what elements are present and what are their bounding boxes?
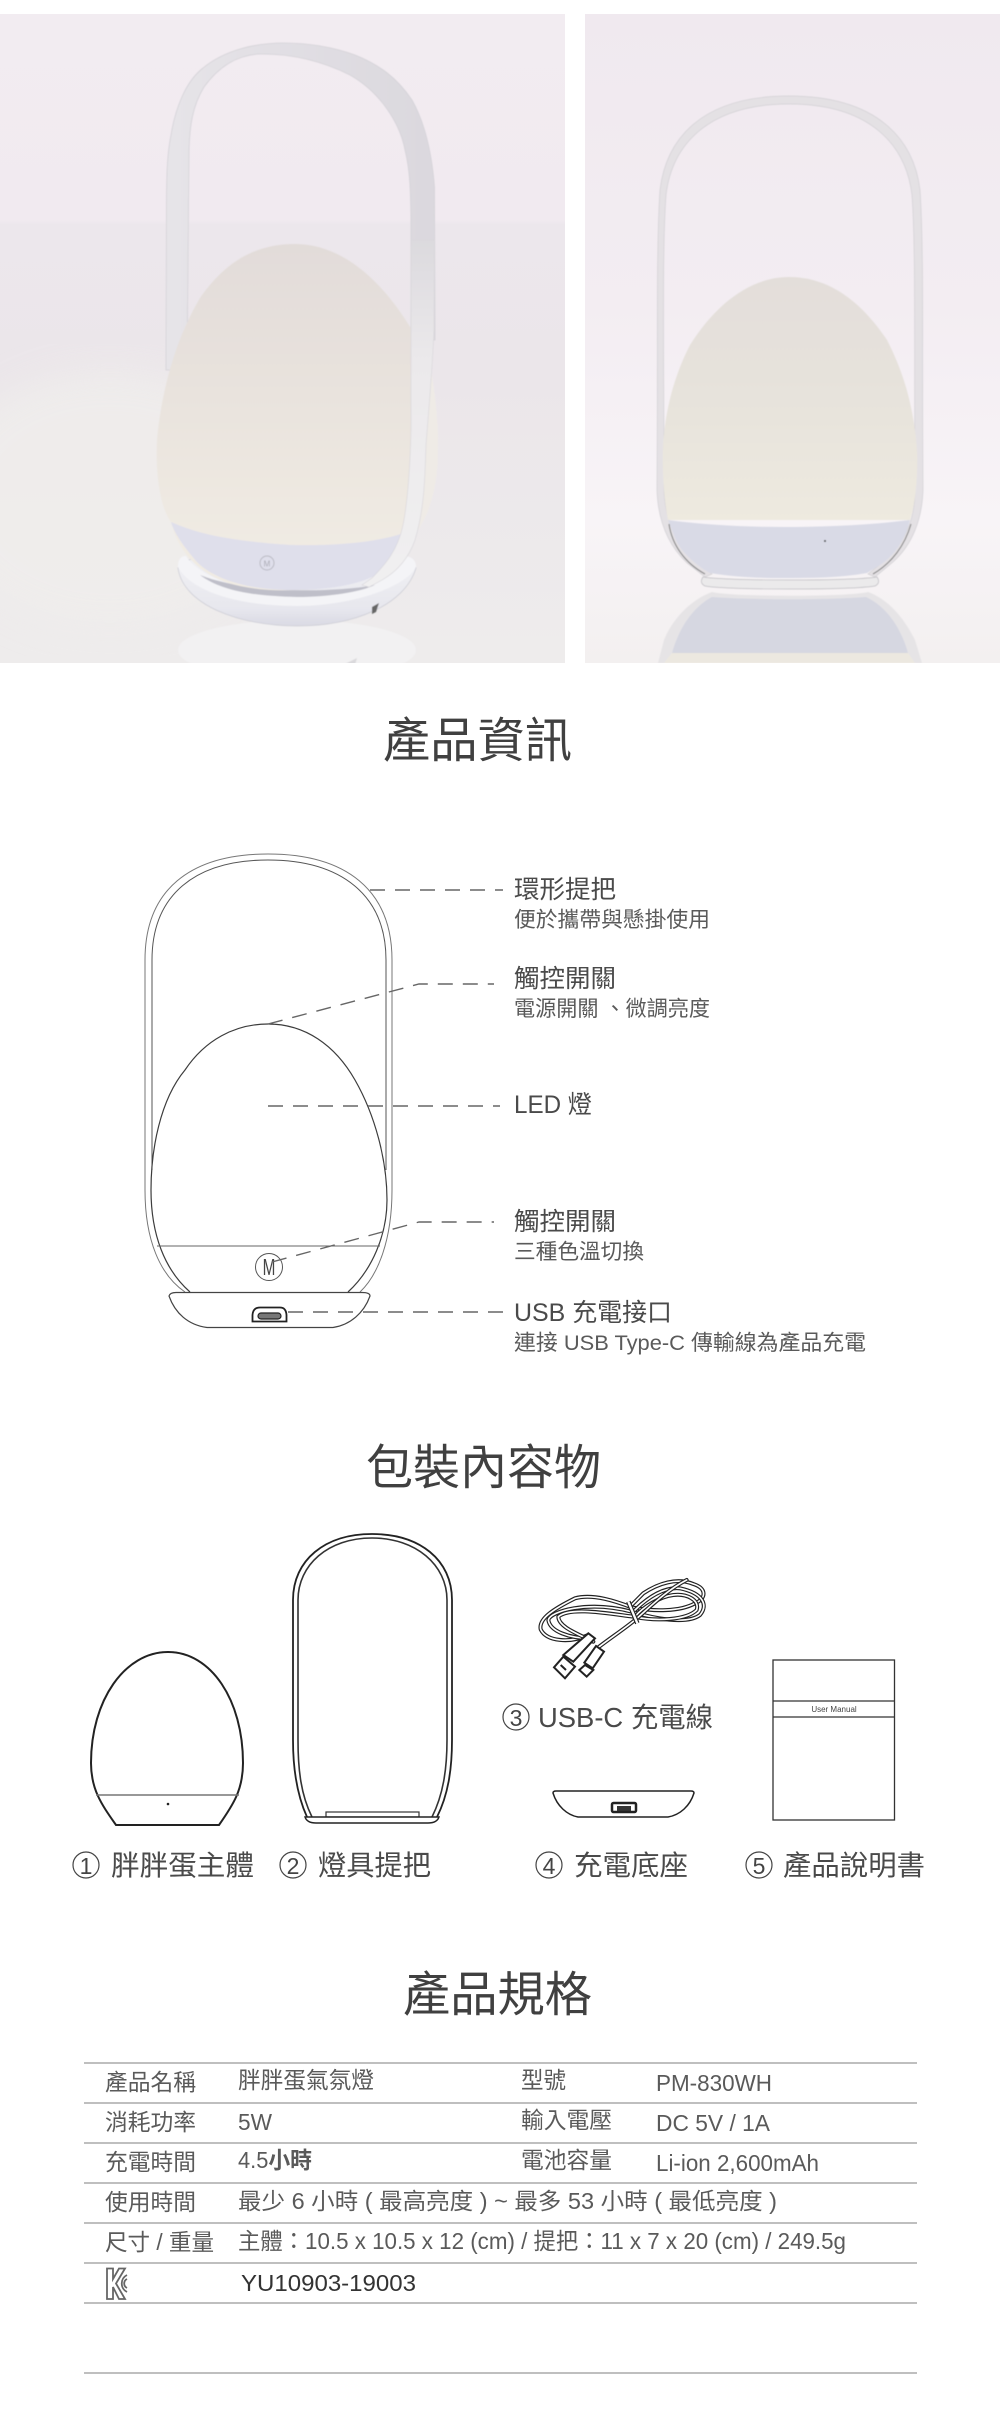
icon: lamp body: [91, 1652, 243, 1825]
row: product name and model: 產品名稱: [105, 2069, 196, 2095]
row: power and input voltage: [105, 2107, 771, 2136]
row: KC certification: [107, 2268, 416, 2299]
photo: lamp front view with reflection: [585, 14, 1000, 663]
icon: USB-C cable: [540, 1580, 704, 1678]
label: touch switch power: 觸控開關: [514, 965, 616, 993]
label: ring handle: [514, 876, 710, 932]
touch button symbol: M: [263, 1255, 275, 1281]
label: lamp body: 胖胖蛋主體: [111, 1850, 254, 1881]
row: charging time and battery: [105, 2147, 819, 2176]
row: charging time and battery: 電池容量: [521, 2147, 612, 2173]
row: power and input voltage: 輸入電壓: [521, 2107, 612, 2133]
icon: KC mark: [107, 2268, 127, 2299]
label: USB charging port: USB 充電接口: [514, 1299, 672, 1327]
icon: charging dock: [553, 1791, 694, 1817]
label: USB-C cable: 3: [510, 1705, 522, 1731]
label: touch switch colour temperature: 三種色溫切換: [514, 1240, 644, 1264]
label: USB charging port: [514, 1299, 866, 1355]
row: size and weight: 主體：10.5 x 10.5 x 12 (cm) / 提把：11 x 7 x 20 (cm) / 249.5g: [238, 2228, 846, 2254]
touch button symbol: [256, 1254, 282, 1281]
row: power and input voltage: 5W: [238, 2109, 272, 2135]
icon: lamp handle: [293, 1534, 452, 1823]
row: charging time and battery: 充電時間: [105, 2149, 196, 2175]
label: ring handle: 便於攜帶與懸掛使用: [514, 908, 710, 932]
row: product name and model: PM-830WH: [656, 2070, 772, 2096]
label: USB charging port: 連接 USB Type-C 傳輸線為產品充電: [514, 1331, 866, 1355]
icon: user manual: User Manual: [811, 1705, 857, 1714]
label: user manual: 5: [753, 1853, 765, 1879]
label: touch switch power: [514, 965, 710, 1021]
row: power and input voltage: DC 5V / 1A: [656, 2110, 771, 2136]
label: user manual: 產品說明書: [783, 1850, 925, 1881]
photo: lamp on charging dock: M: [264, 560, 271, 568]
label: touch switch power: 電源開關 、微調亮度: [514, 997, 710, 1021]
label: lamp handle: 2: [287, 1853, 299, 1879]
heading: product specifications: 產品規格: [403, 1969, 592, 2022]
row: usage time: 使用時間: [105, 2189, 196, 2215]
row: charging time and battery: 4.5小時: [238, 2147, 312, 2173]
row: size and weight: 尺寸 / 重量: [105, 2229, 214, 2255]
leader lines: [268, 890, 505, 1312]
row: product name and model: 胖胖蛋氣氛燈: [238, 2067, 374, 2093]
row: KC certification: YU10903-19003: [241, 2270, 416, 2296]
label: charging dock: 4: [543, 1853, 556, 1879]
label: USB-C cable: USB-C 充電線: [538, 1702, 713, 1733]
icon: user manual: [773, 1660, 894, 1820]
handle outline: [145, 854, 392, 1292]
label: LED light: LED 燈: [514, 1091, 592, 1119]
row: product name and model: 型號: [521, 2067, 566, 2093]
row: power and input voltage: 消耗功率: [105, 2109, 196, 2135]
label: ring handle: 環形提把: [514, 876, 616, 904]
label: touch switch colour temperature: 觸控開關: [514, 1208, 616, 1236]
label: touch switch colour temperature: [514, 1208, 644, 1264]
label: lamp handle: 燈具提把: [318, 1850, 431, 1881]
row: charging time and battery: Li-ion 2,600mAh: [656, 2150, 819, 2176]
row: product name and model: [105, 2067, 772, 2096]
table: specifications: [84, 2063, 917, 2373]
charging dock: [169, 1292, 370, 1328]
label: lamp body: 1: [80, 1853, 92, 1879]
heading: product information: 產品資訊: [383, 715, 572, 768]
egg body outline: [151, 1024, 387, 1292]
row: usage time: 最少 6 小時 ( 最高亮度 ) ~ 最多 53 小時 ( 最低亮度 ): [238, 2188, 777, 2214]
heading: package contents: 包裝內容物: [366, 1442, 601, 1495]
diagram: lamp line drawing: [145, 854, 392, 1328]
photo: lamp on charging dock: [0, 14, 565, 680]
label: charging dock: 充電底座: [574, 1850, 688, 1881]
